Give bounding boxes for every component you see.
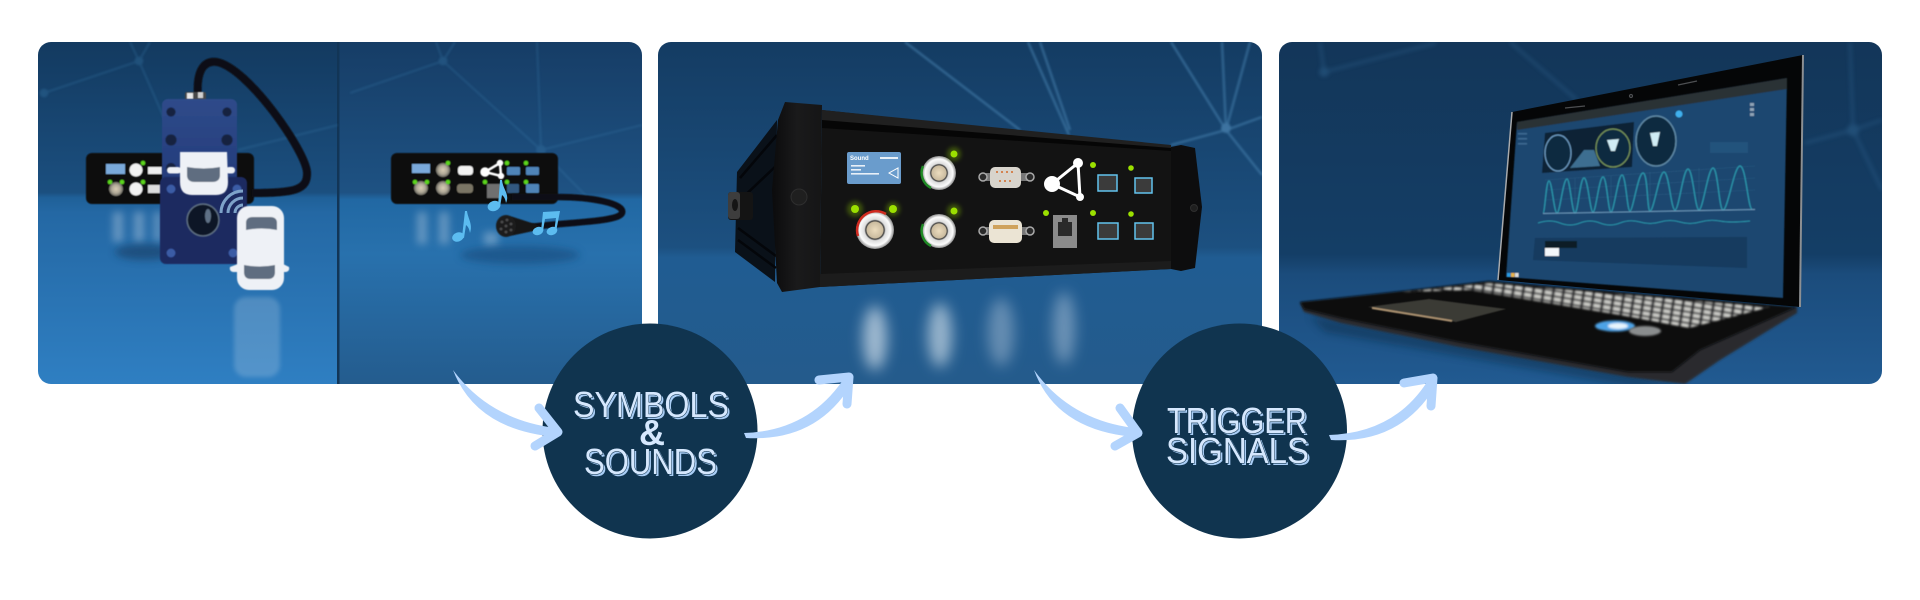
arrow: out of symbols and sounds xyxy=(744,377,851,438)
heading line one shadow: SYMBOLS xyxy=(575,386,731,427)
icon: car top view xyxy=(230,206,289,290)
ampersand: & xyxy=(639,412,665,453)
lid right edge xyxy=(1800,55,1803,307)
circle background xyxy=(542,324,758,538)
sensor lens xyxy=(187,204,219,236)
top groove xyxy=(822,120,1171,151)
lemo connectors xyxy=(856,156,956,249)
white selection box xyxy=(1545,248,1559,256)
heading line one: SYMBOLS xyxy=(573,384,729,425)
icon: wireless waves xyxy=(221,191,243,213)
top right icons xyxy=(1750,103,1754,116)
scene background xyxy=(658,42,1262,384)
microphone cable xyxy=(512,197,622,227)
lid left edge xyxy=(1498,112,1512,280)
button glow xyxy=(1629,326,1661,336)
taskbar icons xyxy=(1507,273,1518,277)
side fins xyxy=(738,135,777,268)
cluster center xyxy=(1570,150,1600,168)
display xyxy=(847,152,901,184)
ethernet port xyxy=(1053,215,1077,248)
floor reflections left xyxy=(113,212,161,242)
cluster gauge right xyxy=(1596,129,1630,167)
background network lines xyxy=(905,42,1262,175)
panel: vehicle and microphone sensors xyxy=(38,42,642,384)
icon: car rear view xyxy=(167,152,235,195)
standalone gauge xyxy=(1636,116,1676,166)
right scene background xyxy=(338,42,642,384)
icon: music notes xyxy=(451,180,560,243)
floor reflections xyxy=(863,292,1075,370)
sensor lower plate xyxy=(160,177,247,264)
badge: trigger signals xyxy=(1132,324,1347,538)
heading line two: SIGNALS xyxy=(1166,430,1309,471)
optical ports xyxy=(1098,175,1153,239)
sidebar rows xyxy=(1518,133,1527,144)
device side xyxy=(735,120,777,282)
cap screws xyxy=(791,189,1198,212)
chart grid xyxy=(1545,166,1755,213)
floor shadow under microphone xyxy=(460,246,580,264)
icon: triangle logo xyxy=(1044,158,1084,200)
circle background xyxy=(1132,324,1347,538)
sensor connector xyxy=(185,92,206,101)
d-sub connectors xyxy=(979,167,1034,243)
left scene background xyxy=(38,42,338,384)
lower chart xyxy=(1538,220,1750,225)
chart axis xyxy=(1543,210,1755,214)
settings panel xyxy=(1533,237,1747,268)
floor shadow left xyxy=(115,244,175,260)
heading line three: SOUNDS xyxy=(584,441,717,482)
sensor holes xyxy=(166,108,242,258)
sensor cable xyxy=(198,62,307,193)
arrow: into symbols and sounds xyxy=(453,370,558,446)
background network lines left xyxy=(40,42,338,150)
bottom rail xyxy=(820,261,1171,287)
panel: laptop software xyxy=(1279,42,1882,388)
laptop base front edge xyxy=(1300,300,1797,384)
dashboard cluster xyxy=(1542,122,1634,173)
sensor upper plate xyxy=(162,99,237,189)
status leds xyxy=(847,147,1134,218)
window title bar xyxy=(1517,78,1787,130)
laptop lid xyxy=(1498,55,1803,307)
heading line two shadow: SIGNALS xyxy=(1168,432,1311,473)
keyboard xyxy=(1402,283,1770,328)
laptop shadow xyxy=(1310,316,1685,388)
microphone head xyxy=(496,215,538,237)
scene divider xyxy=(337,42,340,384)
cluster glow xyxy=(1607,139,1619,151)
icon: triangle on device xyxy=(482,161,503,178)
device behind left xyxy=(86,153,254,204)
badge: symbols and sounds xyxy=(542,324,758,538)
background network lines right xyxy=(351,42,641,153)
heading line three shadow: SOUNDS xyxy=(586,443,719,484)
display: Sound xyxy=(850,156,869,162)
heading line one shadow: TRIGGER xyxy=(1169,402,1309,443)
touchpad xyxy=(1368,299,1506,322)
settings chips xyxy=(1545,241,1577,248)
arrow: out of trigger signals xyxy=(1329,378,1435,440)
heading line one: TRIGGER xyxy=(1167,400,1307,441)
scene background xyxy=(1279,42,1882,384)
blue indicator glow xyxy=(1595,320,1635,332)
panel: signal device xyxy=(658,42,1262,384)
blue status dot xyxy=(1676,110,1682,118)
cluster gauge left xyxy=(1545,135,1571,171)
left end cap xyxy=(772,102,822,292)
car reflection xyxy=(234,297,280,377)
background network lines xyxy=(1319,42,1882,190)
device front face xyxy=(820,110,1171,287)
side knob xyxy=(728,192,753,220)
lid top notches xyxy=(1565,81,1697,108)
main chart xyxy=(1543,166,1752,213)
floor reflections right xyxy=(417,212,498,246)
device behind right xyxy=(391,153,558,204)
laptop screen xyxy=(1506,78,1787,298)
right end cap xyxy=(1171,145,1202,271)
faint label xyxy=(1710,142,1748,153)
top rail xyxy=(822,110,1171,149)
laptop base xyxy=(1300,281,1797,372)
arrow: into trigger signals xyxy=(1034,370,1138,446)
